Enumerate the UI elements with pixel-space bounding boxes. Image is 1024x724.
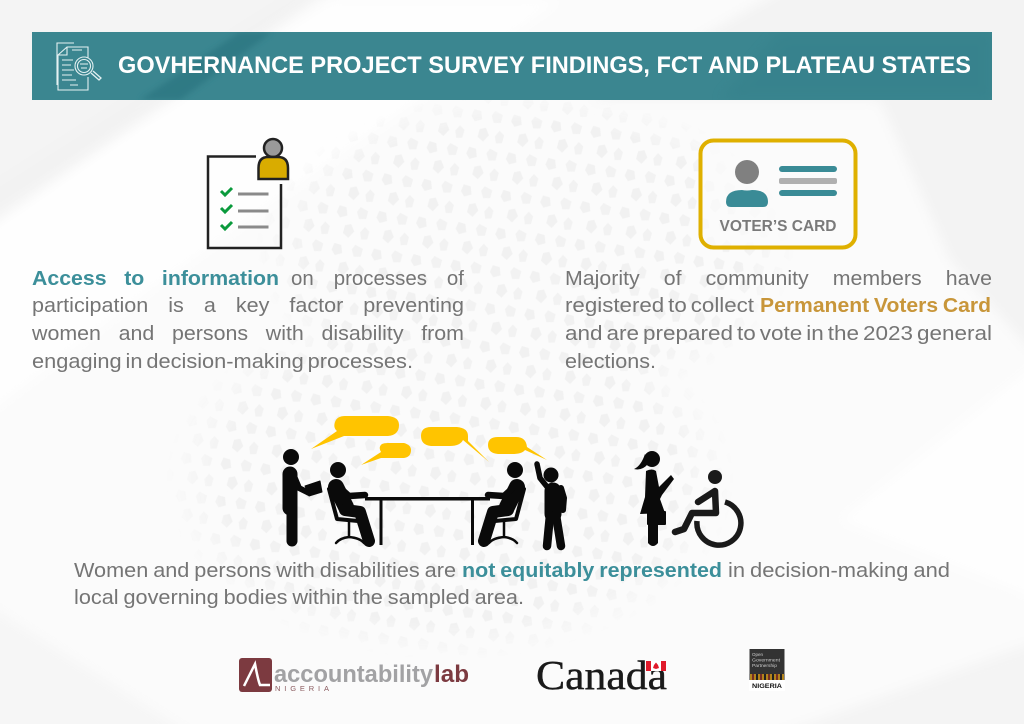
text block: access to information: engaging in decision-making processes. [32,351,413,373]
seated person right [484,462,524,543]
icon: checklist with person [208,139,288,248]
person standing with folder [283,449,322,541]
icon: voter's card: VOTER’S CARD [720,218,836,235]
text block: voters card [565,268,992,373]
text block: equitable representation: in decision-making and [728,560,950,582]
logo: accountability lab: accountability [274,661,434,688]
text block: voters card: and are prepared to vote in the 2023 general [565,323,992,345]
person in wheelchair [675,470,741,545]
text block: access to information: Access to information [32,268,279,290]
text block: voters card: Permanent Voters Card [760,295,991,317]
title: GOVHERNANCE PROJECT SURVEY FINDINGS, FCT AND PLATEAU STATES [118,52,971,79]
logo: Canada wordmark: Canada [536,652,667,698]
icon: document magnifier [57,43,101,90]
table [365,497,490,545]
logo: accountability lab: lab [434,661,469,688]
text block: equitable representation: local governing bodies within the sampled area. [74,587,524,609]
logo: open government partnership [749,649,785,691]
logo: open government partnership: Government [752,658,781,662]
icon: voter's card [700,140,856,248]
illustration: meeting around a table [283,416,741,546]
background facets [0,0,752,631]
logo: accountability lab: NIGERIA [275,684,329,693]
text block: access to information: on processes of [291,268,464,290]
text block: equitable representation [74,560,950,609]
seated person left [329,462,369,543]
text block: voters card: Majority of community members have [565,268,992,290]
logo: open government partnership: NIGERIA [752,684,783,690]
woman with bag [634,451,674,546]
header banner [32,32,992,100]
person raising hand [537,464,564,546]
logo: open government partnership: Open [752,652,764,657]
logo: open government partnership: Partnership [752,663,778,668]
text block: voters card: elections. [565,351,656,373]
speech bubbles [311,416,547,465]
text block: access to information: participation is a key factor preventing [32,295,464,317]
text block: voters card: registered to collect [565,295,754,317]
text block: equitable representation: Women and persons with disabilities are [74,560,456,582]
logo: accountability lab [239,658,469,693]
text block: access to information [31,268,464,373]
text block: equitable representation: not equitably represented [462,560,722,582]
text block: access to information: women and persons with disability from [31,323,464,345]
